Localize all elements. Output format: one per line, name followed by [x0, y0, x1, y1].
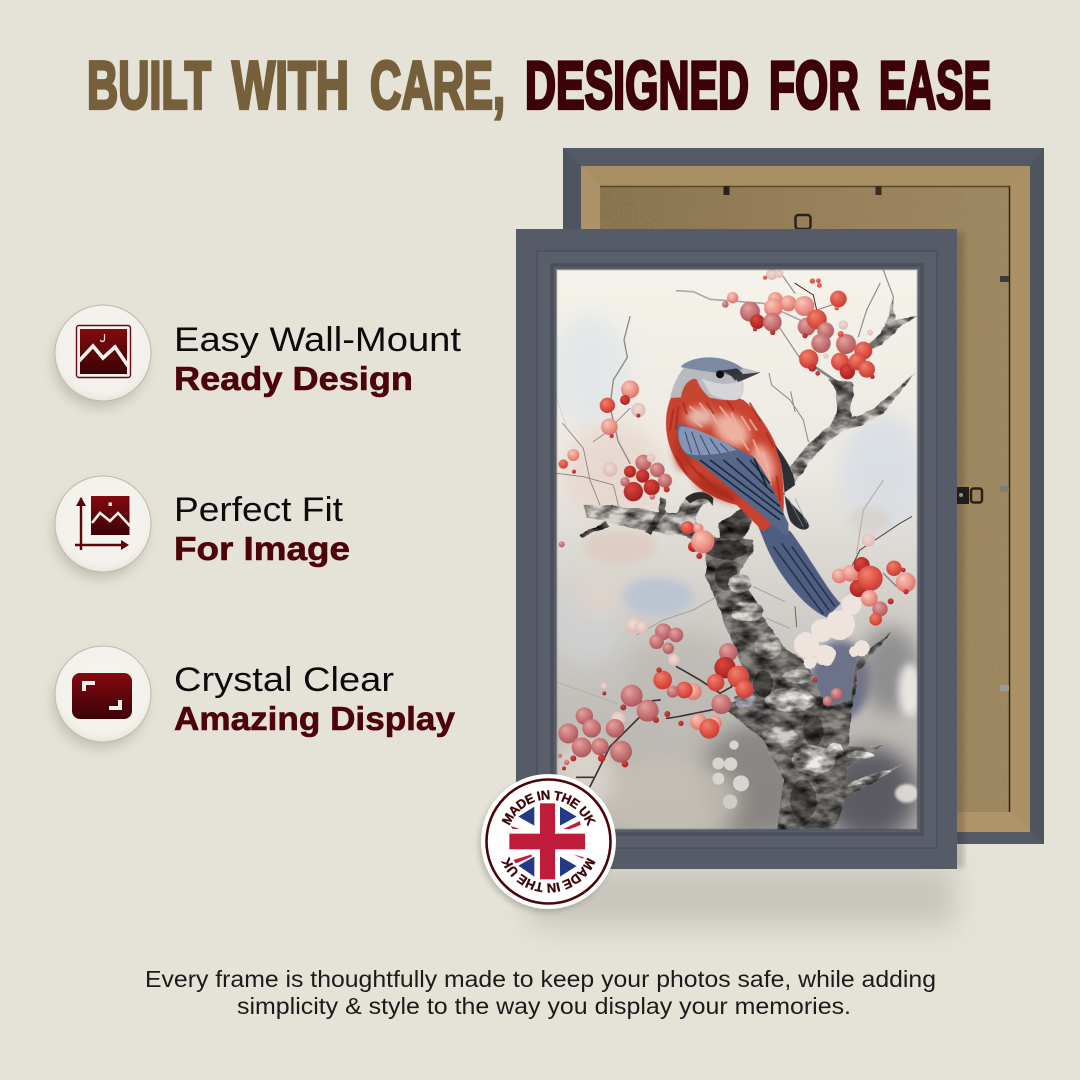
title: FOR — [769, 48, 859, 124]
clips and hangers — [724, 186, 1009, 691]
icon circle: crystal clear — [53, 646, 151, 749]
label: crystal clear amazing display: Amazing Display — [174, 700, 456, 737]
shadow of front frame over back — [954, 232, 964, 868]
frame back moulding — [563, 148, 1044, 844]
branches and tree trunk — [578, 300, 917, 830]
upper right branch — [790, 372, 917, 482]
bird tail — [758, 524, 841, 618]
head — [670, 357, 761, 400]
breast feather patches — [675, 406, 780, 505]
title: BUILT — [87, 48, 211, 124]
label: crystal clear amazing display: Crystal Clear — [174, 661, 394, 699]
icon circle: perfect fit — [53, 476, 151, 579]
moulding — [516, 229, 957, 869]
painting background washes — [550, 269, 927, 843]
eye — [716, 370, 724, 378]
knot — [718, 509, 752, 539]
bird feet — [685, 492, 713, 506]
berries right cluster — [813, 557, 916, 706]
beak — [733, 372, 761, 382]
artwork: bird on berry branch — [550, 269, 927, 843]
title: EASE — [879, 48, 991, 124]
feature: perfect fit — [53, 476, 350, 579]
caption — [145, 966, 936, 1019]
label: easy wall-mount ready design — [174, 321, 462, 397]
union jack flag — [509, 803, 585, 879]
badge text bottom: MADE IN THE UK — [501, 856, 596, 893]
caption: simplicity & style to the way you display your memories. — [237, 993, 851, 1019]
faded background berries — [712, 740, 749, 809]
berries left cluster — [559, 380, 875, 559]
blue wing — [678, 423, 788, 538]
bird — [666, 357, 841, 617]
label: crystal clear amazing display — [174, 661, 456, 737]
title: WITH — [232, 48, 349, 124]
feature: crystal clear — [53, 646, 456, 749]
berries lower left cluster — [558, 683, 632, 770]
dark outer wing — [775, 445, 809, 530]
upper branch stem — [828, 378, 853, 427]
pale blossoms — [794, 595, 870, 668]
mdf border — [581, 166, 1030, 832]
berries upper cluster — [722, 269, 875, 379]
inner art shadow line — [556, 270, 918, 830]
label: easy wall-mount ready design: Easy Wall-Mount — [174, 321, 462, 359]
label: easy wall-mount ready design: Ready Design — [174, 360, 413, 397]
front frame — [516, 229, 957, 869]
bird body — [666, 388, 784, 532]
frame shadow on wall — [530, 866, 955, 926]
badge text top: MADE IN THE UK — [502, 790, 596, 827]
title — [87, 48, 991, 124]
bare twigs — [556, 270, 912, 567]
crest — [681, 357, 743, 377]
title: DESIGNED — [525, 48, 749, 124]
left branch — [583, 491, 753, 568]
title: CARE, — [370, 48, 505, 124]
trunk body — [705, 537, 903, 830]
back of frame — [563, 148, 1044, 844]
label: perfect fit for image: For Image — [174, 530, 350, 567]
icon circle: wall-mount — [53, 305, 151, 408]
label: perfect fit for image: Perfect Fit — [174, 491, 344, 529]
berries centre cluster — [620, 617, 753, 739]
caption: Every frame is thoughtfully made to keep your photos safe, while adding — [145, 966, 936, 992]
backing board — [600, 186, 1010, 812]
label: perfect fit for image — [174, 491, 350, 567]
feature: easy wall-mount — [53, 305, 462, 408]
lower berry twigs — [556, 573, 897, 787]
right twig branch — [868, 300, 917, 349]
feather strokes — [690, 403, 772, 490]
badge: made in the uk — [476, 774, 616, 914]
